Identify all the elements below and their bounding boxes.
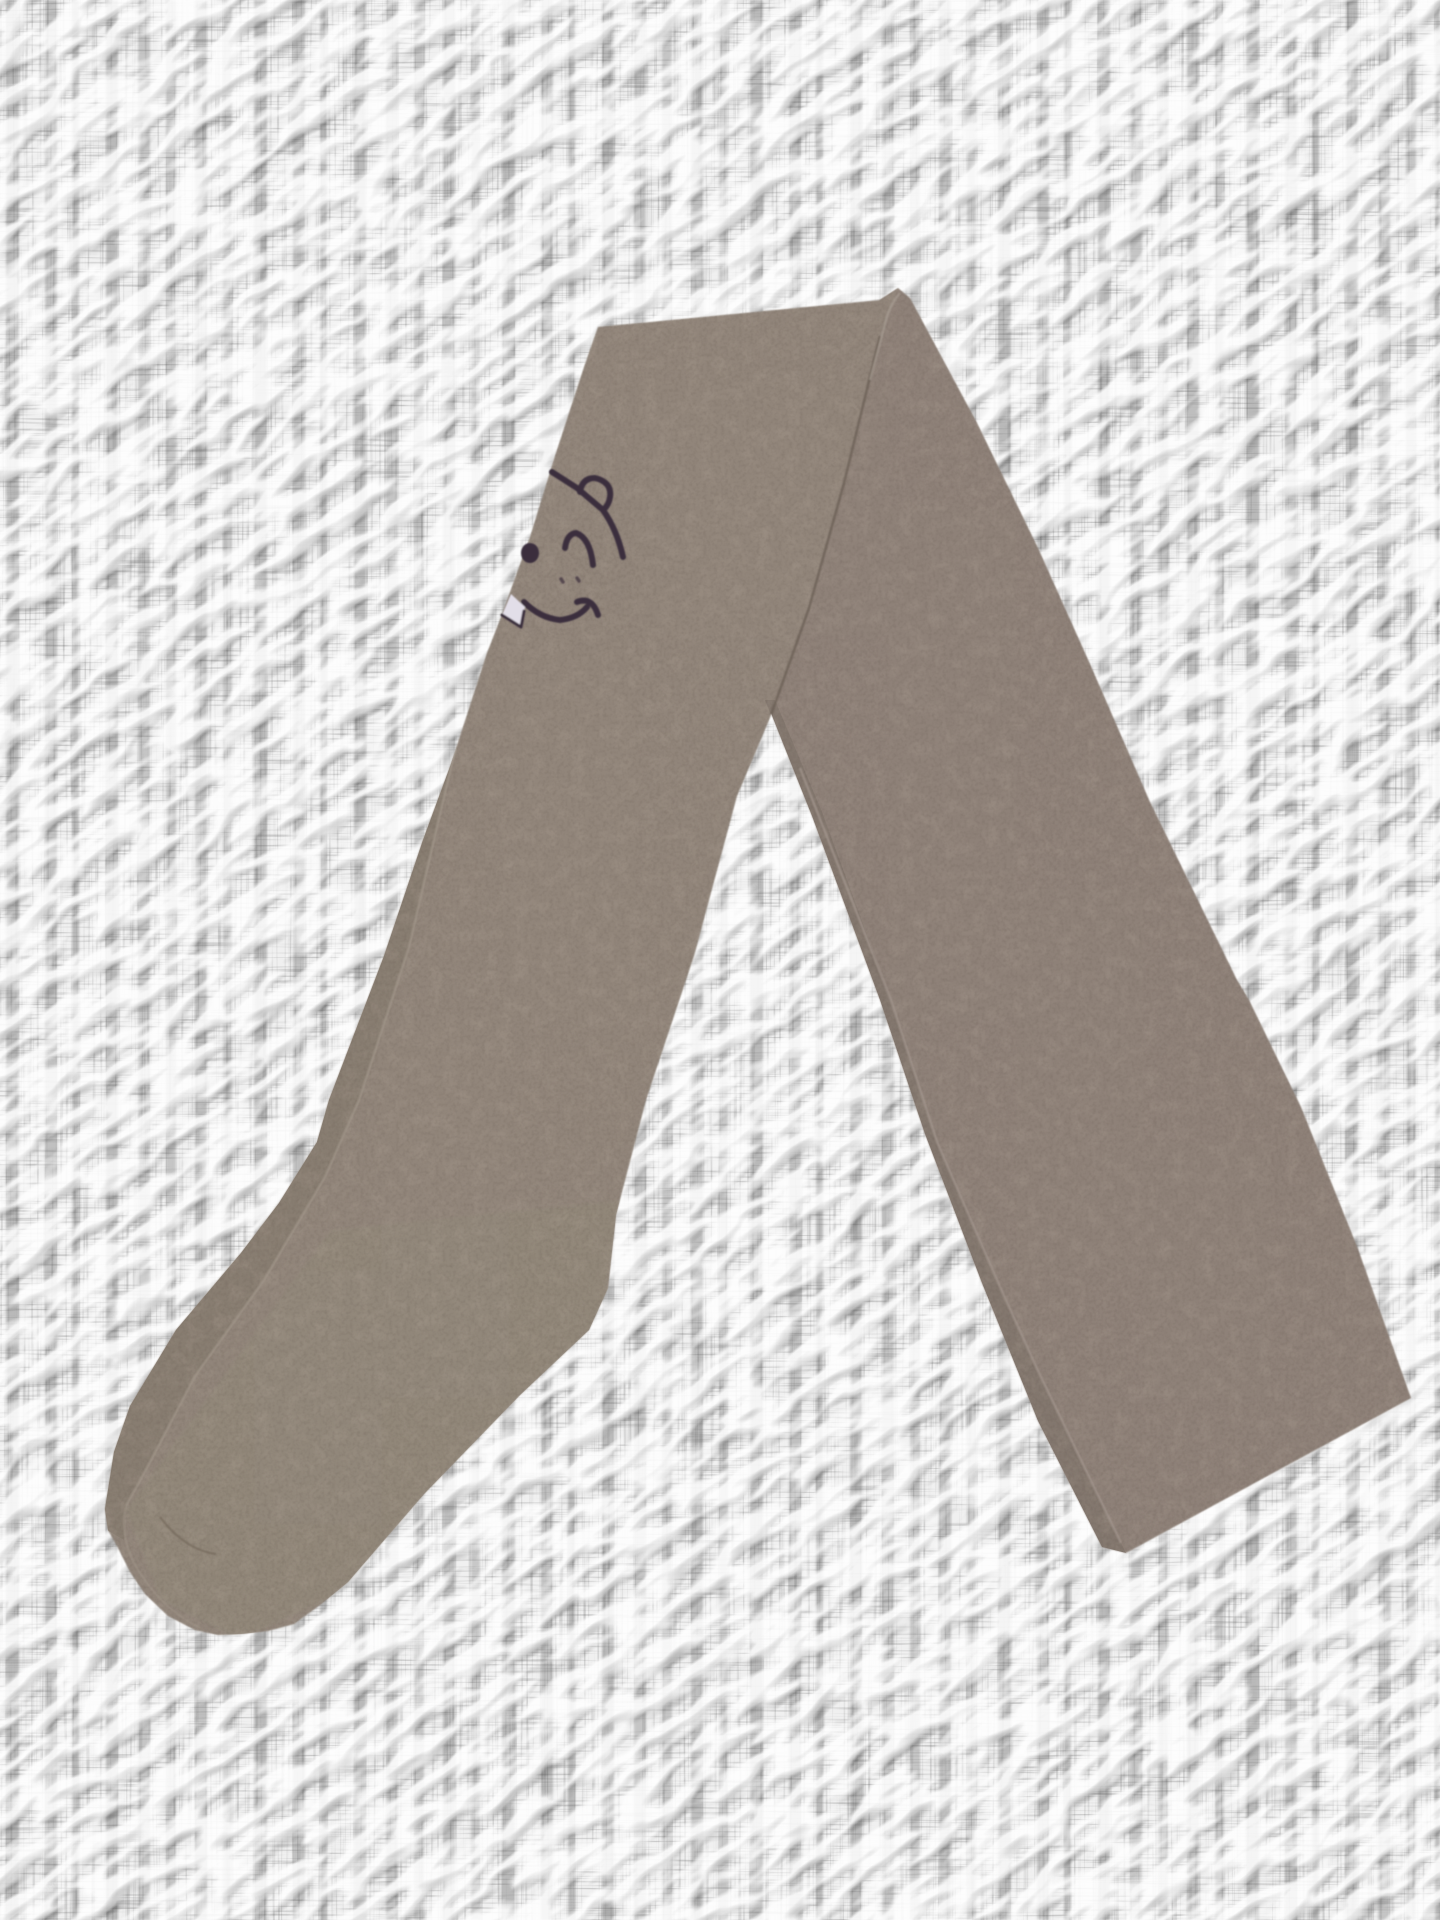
sock	[90, 280, 1420, 1650]
sock: foot tone	[228, 1200, 620, 1634]
sock: top band fold highlight	[870, 293, 900, 380]
sock: back leg inner folded band	[765, 700, 1126, 1553]
bear: open eye	[521, 543, 539, 563]
bear: cheek	[577, 601, 598, 615]
sock: toe crease	[160, 1517, 216, 1554]
sock: back leg (right)	[771, 288, 1411, 1553]
sock: fold line between legs	[771, 336, 880, 715]
bear: nose dots	[561, 578, 579, 582]
bear face motif	[502, 472, 623, 627]
bear: smile	[524, 602, 587, 620]
bear: winking eye	[565, 533, 593, 565]
sock: front leg and foot (left)	[105, 289, 898, 1635]
bear: head outline	[552, 472, 623, 557]
sock: back leg seam highlight	[800, 768, 1121, 1543]
bear: ear	[580, 478, 610, 510]
sock: foot back band	[90, 740, 456, 1540]
sock: shading and knit texture	[90, 280, 1420, 1650]
sock: toe curve	[124, 1506, 200, 1628]
sock: front leg and foot seam highlight	[126, 745, 456, 1506]
bear: white tooth	[502, 594, 525, 627]
